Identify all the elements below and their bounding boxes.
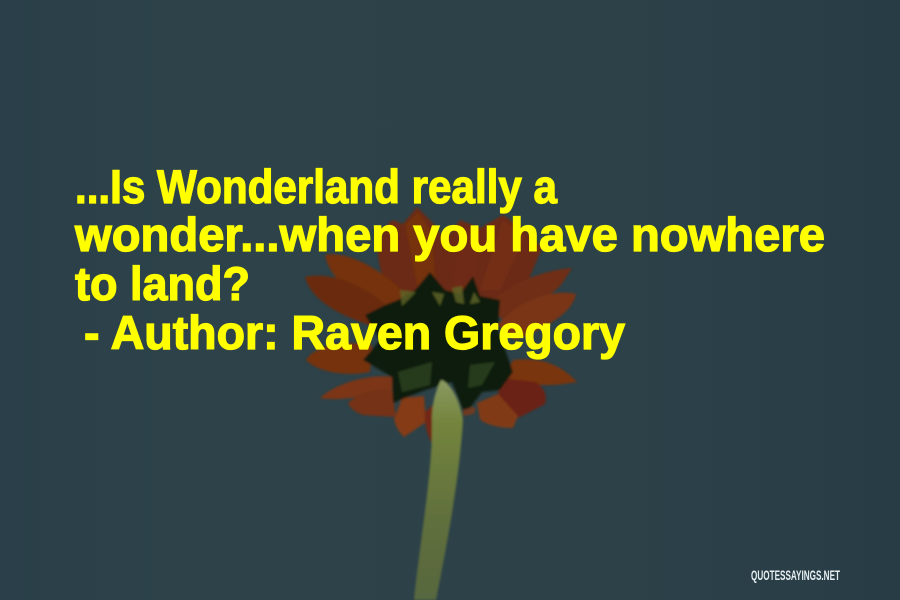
quote line 2: wonder...when you have nowhere: [74, 208, 825, 261]
flower photo: [305, 207, 577, 600]
lower petals: [306, 343, 577, 445]
green calyx: [363, 272, 513, 410]
quote line 3: to land?: [75, 257, 250, 310]
back petals: top: [378, 207, 542, 310]
green highlights: [398, 362, 495, 392]
quote line 1: ...Is Wonderland really a: [75, 160, 558, 213]
stem: [414, 380, 463, 600]
author line: - Author: Raven Gregory: [84, 306, 625, 359]
watermark: QUOTESSAYINGS.NET: [751, 567, 840, 583]
quote text: [74, 160, 825, 310]
yellow florets: [400, 286, 480, 306]
side petals: [305, 254, 576, 340]
